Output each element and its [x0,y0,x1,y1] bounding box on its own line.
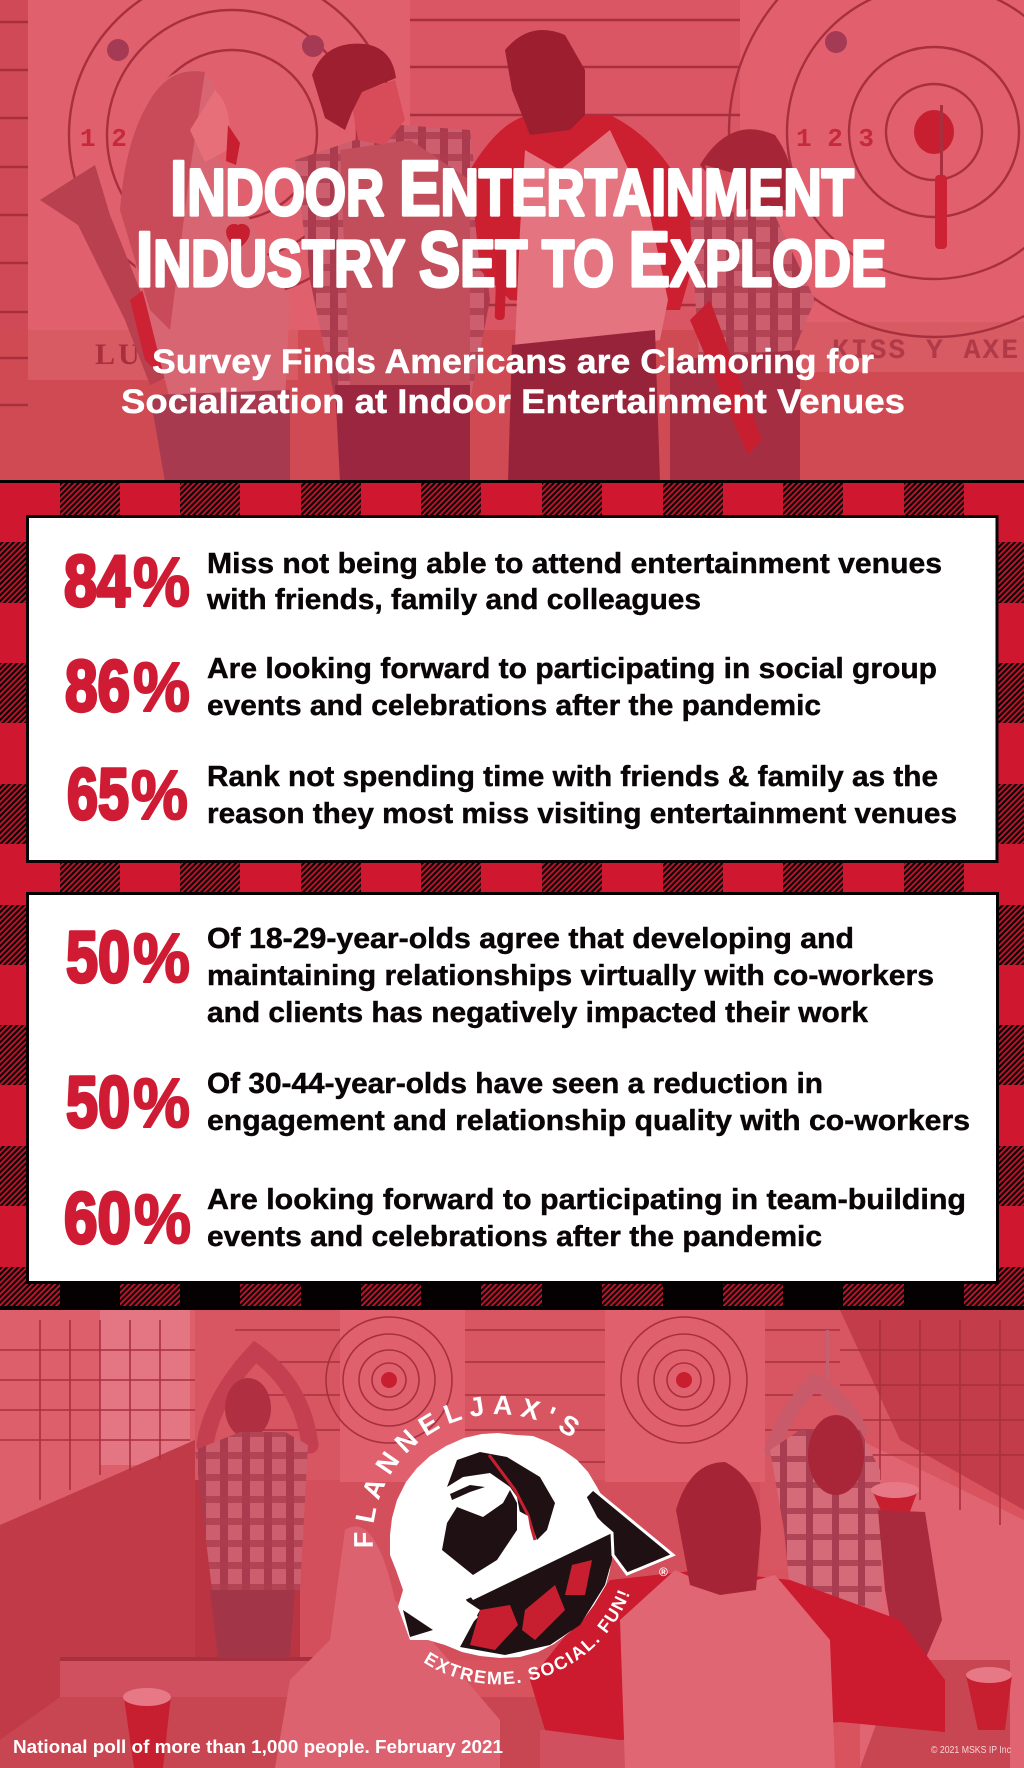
footnote: copyright: © 2021 MSKS IP Inc [931,1745,1011,1756]
logo: lumberjack hat and hair [447,1452,555,1540]
logo: axe head [585,1489,673,1574]
stat: 84 percent: % [133,543,190,621]
stat: 60 percent: events and celebrations after the pandemic [207,1221,822,1253]
stat: 50 percent of 18-29-year-olds: 50 [66,918,130,998]
stat: 60 percent: 60 [64,1179,131,1259]
stat: 60 percent [64,1179,966,1259]
stat: 84 percent: 84 [64,542,130,622]
logo: eye and brow [450,1485,485,1500]
title [136,144,886,303]
logo: axe handle [460,1517,612,1600]
stat: 50 percent of 18-29-year-olds: maintaining relationships virtually with co-workers [207,960,934,992]
stat: 50 percent of 18-29-year-olds: and clients has negatively impacted their work [207,997,869,1029]
title: INDOOR ENTERTAINMENT [170,144,854,232]
stat: 84 percent: Miss not being able to attend entertainment venues [207,548,942,580]
stat: 84 percent: with friends, family and colleagues [206,584,701,616]
logo: shirt with plaid patches [460,1533,612,1655]
stat: 50 percent of 30-44-year-olds: Of 30-44-year-olds have seen a reduction in [207,1068,823,1100]
stat: 86 percent [65,647,937,727]
photo: man in red raglan tee [470,30,700,482]
panel: second statistics box [28,894,998,1282]
logo: wrist shadow [403,1610,433,1637]
stat: 50 percent of 30-44-year-olds: engagement and relationship quality with co-workers [207,1105,970,1137]
stat: 50 percent of 18-29-year-olds: Of 18-29-year-olds agree that developing and [207,923,854,955]
stat: 65 percent [67,755,957,835]
stat: 65 percent: 65 [67,755,129,835]
panel: buffalo plaid background [0,480,1024,1310]
logo: white jagged badge [390,1433,612,1658]
photo: axe target wall: LU [95,338,143,371]
photo: red cups [123,1667,1012,1768]
photo: axe lanes room [0,1310,1024,1768]
stat: 84 percent [64,542,942,622]
photo: blonde woman from behind [275,1526,500,1768]
stat: 86 percent: % [133,648,190,726]
title: INDUSTRY SET TO EXPLODE [136,215,886,303]
stat: 50 percent of 30-44-year-olds [66,1063,970,1143]
subtitle: Survey Finds Americans are Clamoring for [152,343,874,381]
photo: man in plaid shirt [295,44,490,482]
stat: 65 percent: reason they most miss visiting entertainment venues [207,798,957,830]
photo: axe target wall: KISS Y AXE [832,336,1020,367]
photo: man throwing axe at left [195,1352,310,1658]
photo: axe target wall [0,0,1024,482]
panel: hero photo [0,0,1024,482]
panel: first statistics box [28,516,997,862]
stat: 50 percent of 30-44-year-olds: 50 [66,1063,130,1143]
logo: ear [517,1510,530,1528]
logo: Flanneljax's lumberjack badge [354,1396,676,1684]
photo: woman in plaid with cap [670,129,815,482]
photo: woman with axe [40,70,290,482]
photo: axe target wall: 1 2 3 [796,124,874,154]
logo: beard [442,1490,517,1575]
panel: bottom photo [0,1310,1024,1768]
stat: 86 percent: events and celebrations after the pandemic [207,690,821,722]
logo: brand name on arc: FLANNELJAX'S [354,1396,579,1546]
stat: 60 percent: Are looking forward to participating in team-building [207,1184,966,1216]
stat: 65 percent: % [131,756,188,834]
logo: tagline on arc: EXTREME. SOCIAL. FUN! [424,1590,630,1684]
stat: 50 percent of 18-29-year-olds: % [133,919,190,997]
stat: 50 percent of 30-44-year-olds: % [133,1064,190,1142]
subtitle: Socialization at Indoor Entertainment Venues [121,383,905,421]
stat: 86 percent: Are looking forward to participating in social group [207,653,937,685]
footnote: poll source: National poll of more than 1,000 people. February 2021 [13,1737,503,1757]
photo: axe target wall: 1 2 [80,124,127,154]
photo: man in raglan from behind [530,1462,945,1768]
logo: red hat stripe [489,1455,535,1540]
stat: 65 percent: Rank not spending time with friends & family as the [207,761,938,793]
logo: registered mark: ® [659,1565,668,1579]
stat: 60 percent: % [134,1180,191,1258]
stat: 50 percent of 18-29-year-olds [66,918,934,1029]
logo: hand gripping handle [403,1587,478,1643]
subtitle [121,343,905,421]
stat: 86 percent: 86 [65,647,130,727]
photo: woman throwing axe at right [770,1330,942,1660]
